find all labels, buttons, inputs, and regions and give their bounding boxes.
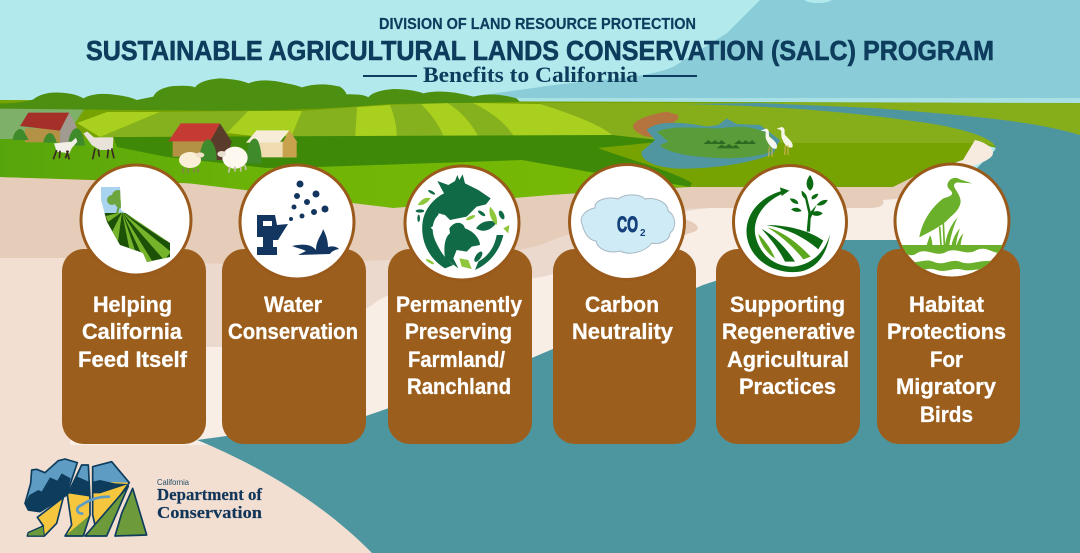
title block (86, 16, 994, 87)
wordmark: Conservation (157, 503, 263, 522)
icon: farm animals (416, 174, 509, 270)
main title: SUSTAINABLE AGRICULTURAL LANDS CONSERVATION (SALC) PROGRAM (86, 35, 994, 66)
wordmark: California (157, 477, 189, 487)
label (722, 292, 855, 399)
foreground hill (0, 139, 692, 208)
icon: CO2 cloud (581, 195, 675, 253)
panel: water conservation (222, 165, 366, 444)
label: Feed Itself (78, 347, 188, 372)
farm buildings and animals (13, 113, 298, 173)
label: Preserving (405, 319, 512, 344)
front leg piece (27, 497, 63, 536)
river and bay (197, 103, 1080, 553)
goats (53, 132, 114, 159)
panel: regenerative agriculture (716, 166, 860, 444)
label: Migratory (896, 374, 997, 399)
barn middle (168, 123, 232, 161)
sandy point (913, 140, 993, 187)
label: Agricultural (727, 347, 849, 372)
panel: carbon neutrality (553, 164, 696, 444)
label (228, 292, 358, 344)
icon: bear (25, 459, 147, 536)
subtitle: Benefits to California (423, 62, 638, 87)
division heading: DIVISION OF LAND RESOURCE PROTECTION (379, 16, 696, 33)
icon: CO2 cloud: CO (617, 212, 638, 237)
label: California (82, 319, 183, 344)
label: Protections (887, 319, 1006, 344)
label (572, 292, 674, 344)
icon: heron and water (900, 178, 1003, 272)
panel: helping California feed itself (62, 165, 206, 444)
panel: habitat protections (877, 164, 1020, 444)
dark green band (113, 135, 692, 187)
label: Birds (920, 402, 973, 427)
label: Neutrality (572, 319, 674, 344)
label (887, 292, 1006, 427)
label (78, 292, 188, 372)
label: Ranchland (407, 374, 511, 399)
head piece (25, 459, 77, 512)
label: Helping (93, 292, 172, 317)
logo: Department of Conservation (25, 459, 263, 536)
panel: preserving farmland and ranchland (388, 166, 532, 444)
egrets (761, 127, 793, 157)
label: Regenerative (722, 319, 855, 344)
label: Supporting (730, 292, 845, 317)
wordmark (157, 477, 263, 522)
label: Water (264, 292, 322, 317)
label (396, 292, 523, 399)
river (77, 497, 110, 514)
label: Habitat (909, 292, 985, 317)
farm fields (0, 103, 692, 208)
barn left (13, 113, 85, 146)
icon: sprinkler (257, 180, 339, 255)
label: For (930, 347, 963, 372)
wetland lake (633, 112, 793, 169)
icon: California map (101, 187, 170, 262)
label: Practices (739, 374, 836, 399)
label: Farmland/ (408, 347, 505, 372)
middle piece (65, 465, 90, 536)
icon: CO2 cloud: 2 (640, 228, 646, 239)
label: Permanently (396, 292, 523, 317)
hind leg pieces (85, 486, 128, 536)
sheep (179, 147, 248, 173)
treeline (0, 78, 520, 111)
label: Carbon (585, 292, 659, 317)
icon: regenerative field and tree (747, 175, 830, 272)
label: Conservation (228, 319, 358, 344)
right body piece (93, 462, 129, 525)
wordmark: Department of (157, 485, 262, 504)
reeds (703, 140, 756, 148)
farmhouse (246, 130, 298, 163)
